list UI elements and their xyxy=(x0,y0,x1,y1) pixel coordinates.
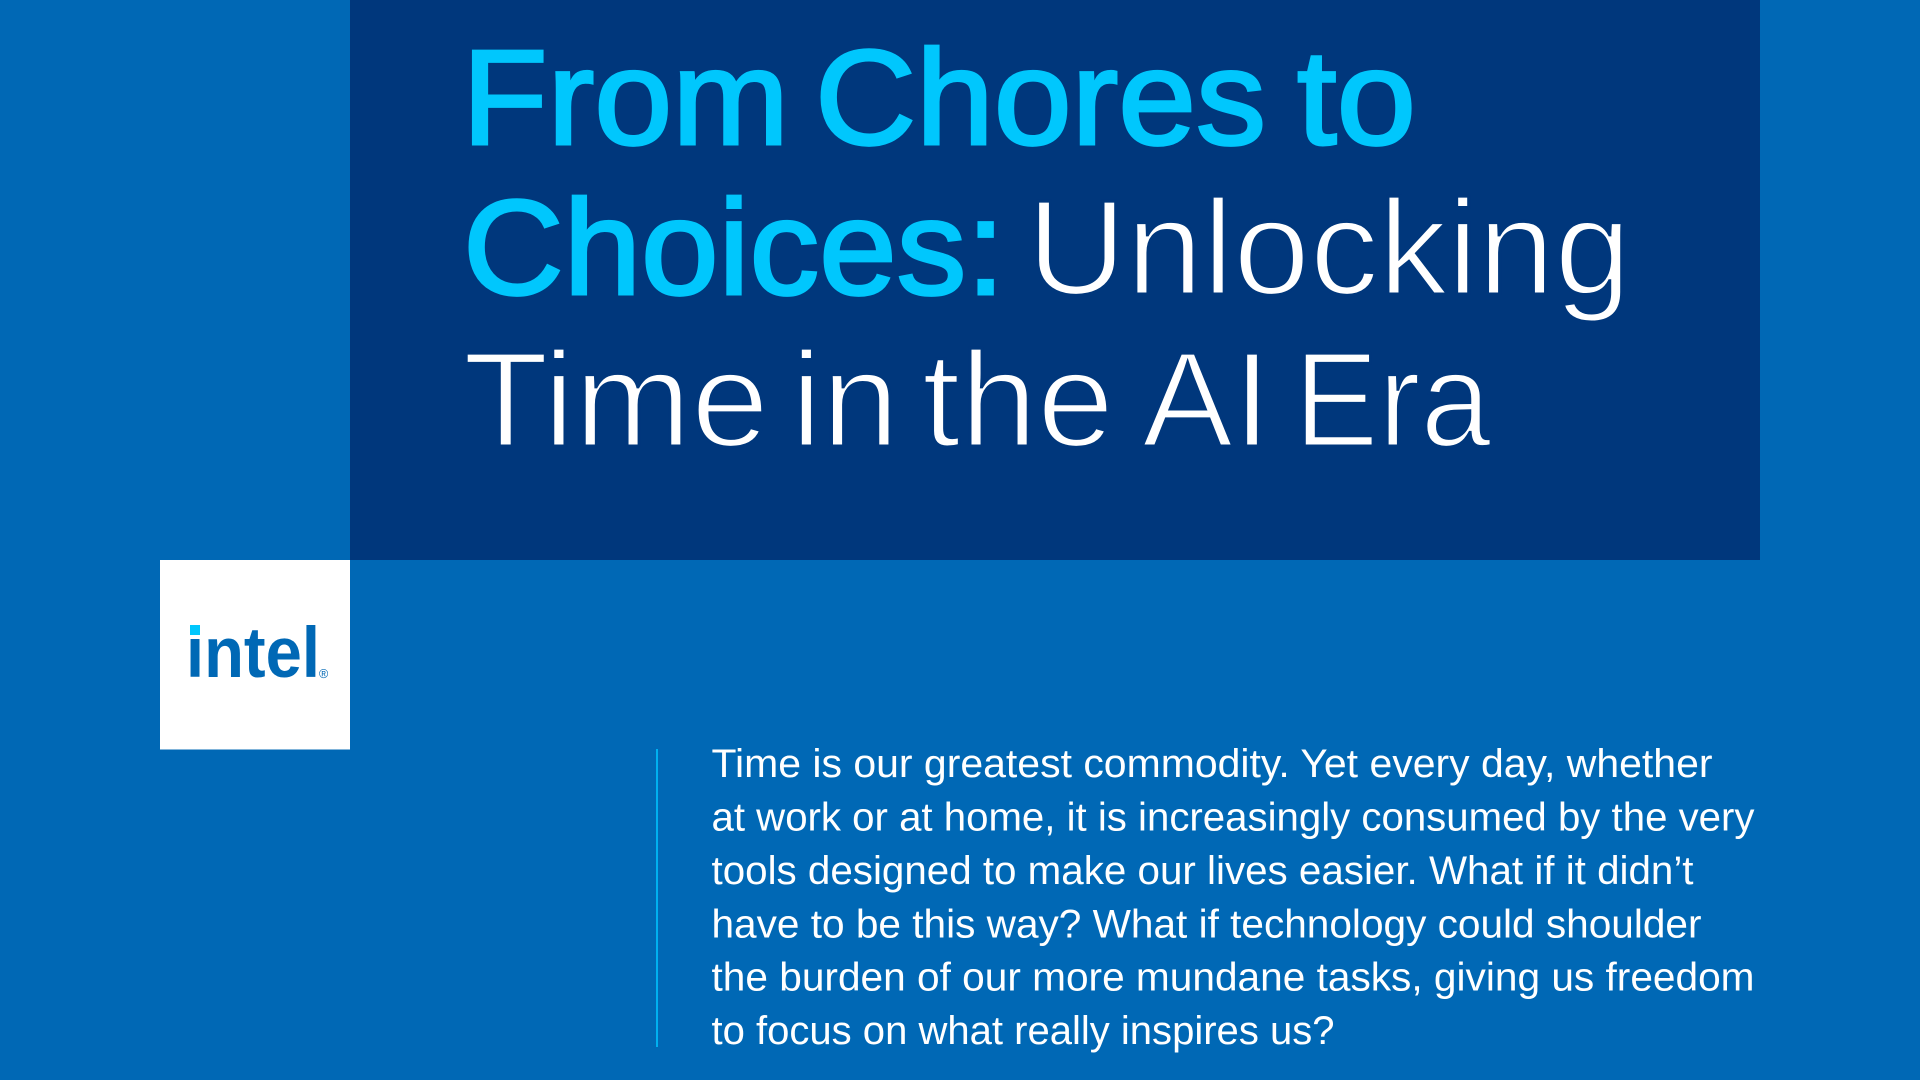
title line 1: to xyxy=(1297,22,1416,173)
paragraph line 1: Time is our greatest commodity. Yet every day, whether xyxy=(712,742,1712,786)
intro paragraph xyxy=(712,742,1754,1053)
title line 2 white: Unlocking xyxy=(1027,172,1631,323)
title line 3: Time xyxy=(463,324,769,475)
intel logo wordmark: intel xyxy=(186,614,320,693)
title line 3: in xyxy=(791,324,899,475)
title line 3 xyxy=(463,324,1492,475)
accent rule xyxy=(656,749,658,1047)
paragraph line 6: to focus on what really inspires us? xyxy=(712,1009,1334,1053)
title line 3: AI xyxy=(1142,324,1271,475)
paragraph line 5: the burden of our more mundane tasks, giving us freedom xyxy=(712,956,1754,1000)
paragraph line 2: at work or at home, it is increasingly consumed by the very xyxy=(712,795,1754,839)
icon: logo dot xyxy=(190,625,200,635)
title line 2 highlighted: Choices: xyxy=(463,172,1005,323)
panel: title background xyxy=(350,0,1760,560)
logo registered mark: ® xyxy=(319,667,329,681)
title line 3: the xyxy=(922,324,1114,475)
title line 1 xyxy=(462,22,1416,173)
title xyxy=(462,22,1631,475)
title line 1: Chores xyxy=(815,22,1266,173)
paragraph line 4: have to be this way? What if technology could shoulder xyxy=(712,902,1702,946)
paragraph line 3: tools designed to make our lives easier. What if it didn’t xyxy=(712,849,1694,893)
title line 1: From xyxy=(462,22,789,173)
title line 3: Era xyxy=(1294,324,1492,475)
logo panel xyxy=(160,560,350,750)
